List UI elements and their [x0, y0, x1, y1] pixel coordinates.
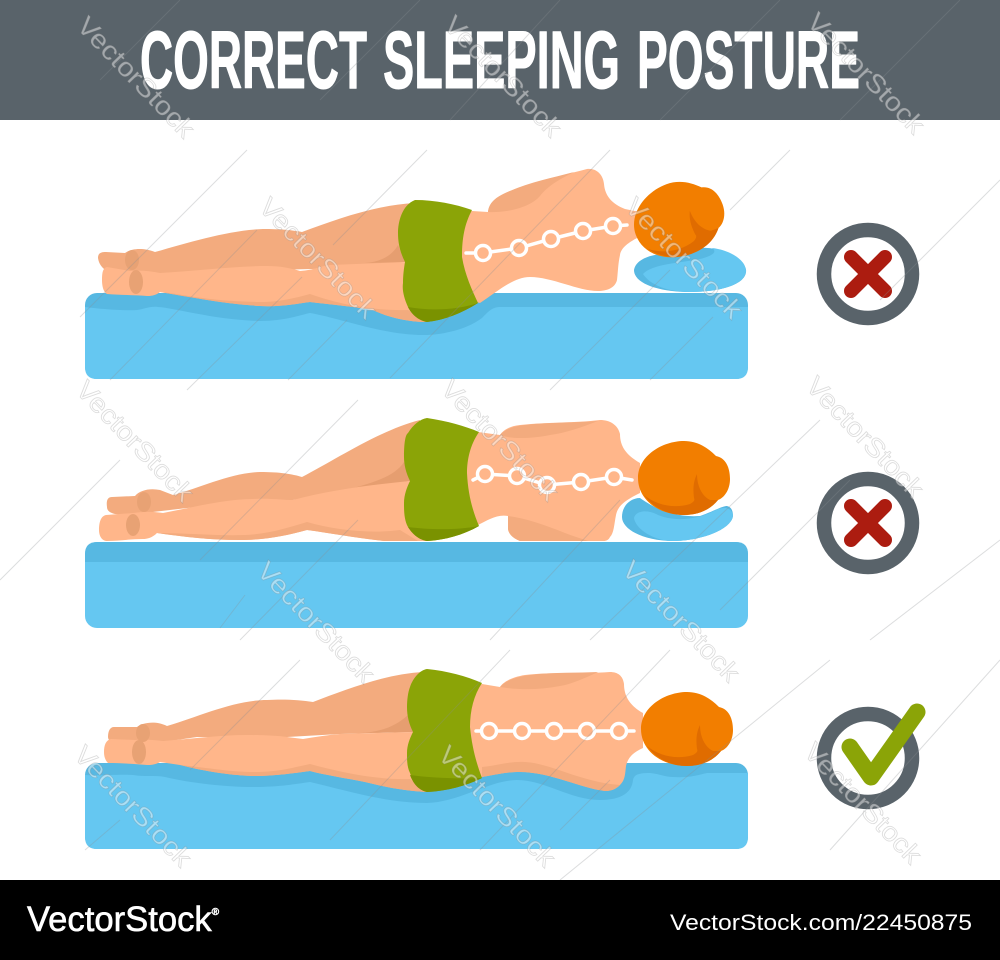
upper leg three: [108, 672, 423, 742]
watermark text: VectorStock: [68, 739, 199, 873]
title: [140, 15, 860, 106]
upper leg one: [98, 203, 415, 274]
watermark text: VectorStock: [435, 373, 566, 507]
panel: posture three, correct alignment on contouring mattress: [85, 669, 917, 849]
shoulder shade three: [500, 672, 598, 689]
badge three: check mark: [824, 712, 917, 802]
upper leg shadow two: [350, 462, 410, 489]
ankle marks one: [125, 250, 143, 294]
watermark text: [68, 6, 932, 873]
upper leg two: [107, 420, 420, 515]
lower leg one: [102, 262, 427, 322]
footer logo: VectorStock: [27, 900, 214, 939]
title: CORRECT: [140, 15, 367, 106]
torso one: [450, 169, 640, 303]
mattress three: [85, 763, 748, 849]
badge two: cross: [824, 479, 912, 567]
torso three: [450, 672, 643, 791]
mattress two: [85, 542, 748, 628]
shoulder shade one: [488, 172, 574, 212]
lower shoulder shade two: [508, 516, 588, 541]
watermark text: VectorStock: [619, 191, 750, 325]
panel: footer bar: [0, 880, 1000, 960]
lower torso shade three: [482, 762, 620, 791]
watermark text: VectorStock: [251, 555, 382, 689]
lower leg shadow three: [180, 764, 427, 792]
pillow one: [634, 248, 746, 292]
shorts two: [404, 418, 479, 541]
panel: posture two, firm mattress with low pillow: [85, 418, 912, 628]
footer image id: VectorStock.com/22450875: [670, 910, 972, 935]
panel: header banner: [0, 0, 1000, 120]
title: SLEEPING: [383, 15, 620, 106]
spine one: [466, 218, 627, 260]
pillow two: [622, 498, 733, 541]
lower leg three: [104, 732, 427, 792]
watermark text: VectorStock: [70, 374, 201, 508]
watermark text: VectorStock: [71, 10, 202, 144]
ankle marks three: [132, 724, 150, 764]
upper leg shadow three: [360, 715, 413, 733]
shoulder shade two: [500, 421, 598, 438]
upper leg shadow one: [365, 245, 405, 263]
head one: [623, 168, 735, 270]
lower leg shadow two: [157, 522, 418, 541]
watermark text: VectorStock: [438, 9, 569, 143]
lower leg two: [99, 481, 427, 541]
watermark text: VectorStock: [253, 191, 384, 325]
head three: [641, 692, 733, 766]
watermark text: VectorStock: [798, 736, 929, 870]
badge one: cross: [824, 230, 912, 318]
footer logo: ®: [212, 907, 220, 918]
mattress one: [85, 293, 748, 379]
shorts one: [398, 200, 478, 322]
watermark text: VectorStock: [800, 370, 931, 504]
lower leg shadow one: [160, 292, 427, 322]
watermark text: VectorStock: [801, 6, 932, 140]
spine two: [473, 466, 632, 492]
head two: [638, 441, 730, 515]
watermark text: VectorStock: [432, 739, 563, 873]
watermark text: VectorStock: [616, 554, 747, 688]
torso two: [450, 420, 640, 541]
shorts three: [407, 669, 482, 792]
ankle marks two: [126, 492, 151, 536]
panel: posture one, too high pillow on soft mattress: [85, 168, 912, 379]
spine three: [476, 724, 634, 738]
